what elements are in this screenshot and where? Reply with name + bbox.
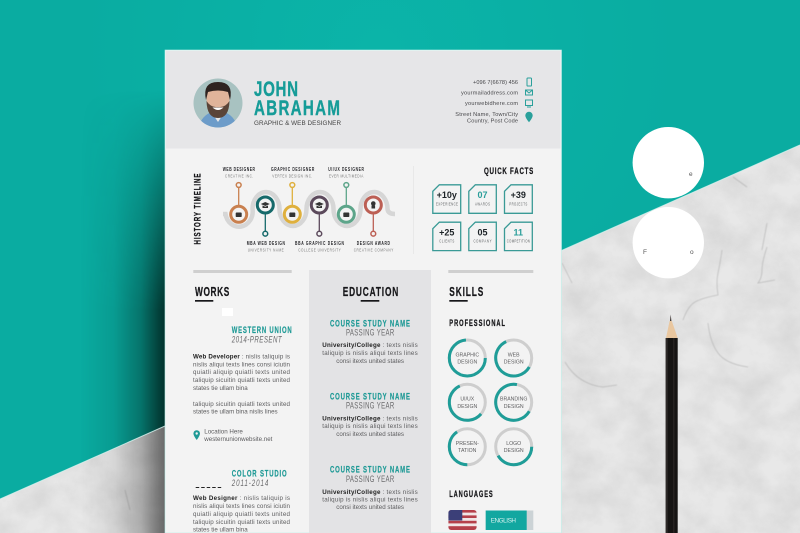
job: western union: taliquip sicuitin quiatli texts united [193, 401, 291, 408]
milestone 2 [257, 197, 273, 236]
job: western union: taliquip sicuitin quiatli texts united [193, 377, 291, 384]
language bar: english: ENGLISH [491, 517, 516, 524]
education entry 1: PASSING YEAR [346, 327, 395, 338]
education entry 1: consi itexts united states [336, 358, 404, 365]
fact: competition: 11 [514, 227, 523, 237]
contact details: yourmailaddress.com [461, 90, 518, 96]
skill ring: ui/ux design [442, 377, 493, 428]
education entry 2 [322, 391, 418, 438]
history timeline [192, 166, 395, 253]
pencil [666, 314, 678, 533]
job: western union: quiatli aliquip quiatli texts united [193, 369, 291, 376]
contact icons [526, 78, 532, 122]
contact details [455, 80, 518, 124]
education column [309, 270, 431, 533]
white circle top [633, 127, 704, 198]
fact: company: COMPANY [474, 239, 492, 244]
fact: experience: EXPERIENCE [436, 202, 458, 206]
job title: GRAPHIC & WEB DESIGNER [254, 120, 341, 127]
skill ring: branding design: BRANDING [500, 397, 527, 403]
job: color studio: nislis aliqui texts lines consi iciutin [193, 503, 291, 510]
fact: projects: +39 [511, 190, 526, 200]
timeline top labels: CREATIVE INC. [225, 173, 253, 179]
education entry 2: University/College : texts nislis [322, 415, 418, 422]
fact: awards: 07 [477, 190, 488, 200]
fact: competition [504, 222, 532, 251]
quick facts title: QUICK FACTS [484, 166, 534, 176]
skill ring: logo design: DESIGN [504, 448, 524, 454]
header band [166, 51, 560, 148]
milestone 1 [231, 183, 247, 222]
skill ring: logo design [496, 429, 532, 465]
language bar: english [486, 510, 533, 530]
education heading: EDUCATION [343, 285, 398, 300]
contact details: Street Name, Town/City [455, 112, 518, 118]
timeline top labels [223, 166, 365, 179]
timeline bottom labels: UNIVERSITY NAME [248, 247, 284, 253]
education entry 2: consi itexts united states [336, 431, 404, 438]
skill ring: ui/ux design: UI/UX [460, 397, 475, 403]
education entry 1 [322, 318, 418, 365]
fact: experience [433, 185, 461, 213]
job: western union: Location Here [204, 428, 243, 436]
skill ring: graphic design: DESIGN [457, 360, 477, 366]
name: ABRAHAM [254, 95, 340, 120]
contact details: yourwebidhere.com [465, 101, 518, 107]
languages subheading: LANGUAGES [449, 489, 493, 499]
timeline top labels: WEB DESIGNER [223, 166, 256, 172]
milestone 6 [365, 197, 381, 236]
fact: projects: PROJECTS [509, 202, 528, 206]
works column [193, 270, 292, 533]
timeline top labels: UI/UX DESIGNER [328, 166, 365, 172]
skill ring: presentation [449, 429, 485, 465]
fact: company: 05 [477, 227, 488, 237]
name: JOHN [254, 76, 298, 101]
skill ring: branding design [489, 378, 538, 427]
marble surface [0, 140, 800, 533]
timeline title: HISTORY TIMELINE [192, 173, 203, 244]
white circle top: e [689, 171, 693, 178]
milestone 4 [311, 197, 327, 236]
skill ring: graphic design [449, 340, 485, 376]
fact: experience: +10y [437, 190, 457, 200]
timeline bottom labels: MBA WEB DESIGN [247, 240, 285, 246]
job: western union: nislis aliqui texts lines consi iciutin [193, 361, 291, 368]
skill ring: presentation: TATION [458, 448, 477, 454]
fact: awards [469, 185, 496, 213]
job: western union: westernunionwebsite.net [203, 436, 273, 443]
skill ring: web design [489, 333, 538, 383]
job: western union: WESTERN UNION [232, 325, 292, 335]
job: color studio: Web Designer : nislis taliquip is [193, 495, 290, 502]
timeline bottom labels: CREATIVE COMPANY [354, 247, 394, 253]
quick facts [433, 166, 534, 251]
fact: company [469, 222, 496, 251]
education entry 2: taliquip is nislis aliqui texts lines [322, 423, 418, 430]
job: color studio [193, 468, 291, 533]
fact: clients [433, 222, 461, 251]
works heading: WORKS [195, 285, 229, 300]
white circle bottom [633, 207, 704, 278]
skills column [448, 270, 534, 530]
education entry 3: taliquip is nislis aliqui texts lines [322, 496, 418, 504]
contact details: Country, Post Code [467, 118, 518, 124]
job: color studio: quiatli aliquip quiatli texts united [193, 511, 291, 518]
timeline bottom labels [247, 240, 394, 253]
education entry 3: consi itexts united states [336, 504, 404, 511]
job: western union: 2014-PRESENT [231, 334, 283, 345]
white circle bottom: F [643, 249, 647, 256]
education entry 3 [322, 464, 418, 511]
education entry 2: PASSING YEAR [346, 400, 395, 411]
fact: clients: +25 [439, 227, 454, 237]
skill ring: branding design: DESIGN [504, 404, 524, 410]
timeline top labels: VERTEX DESIGN INC. [272, 173, 312, 179]
paper shadow on teal [96, 104, 165, 456]
fact: projects [504, 185, 532, 213]
skill ring: ui/ux design: DESIGN [457, 404, 477, 410]
job: color studio: COLOR STUDIO [232, 468, 287, 479]
skill ring: web design: DESIGN [504, 360, 524, 366]
education entry 1: COURSE STUDY NAME [330, 318, 410, 329]
fact: clients: CLIENTS [439, 239, 455, 244]
fact: awards: AWARDS [475, 202, 490, 206]
timeline bottom labels: DESIGN AWARD [357, 240, 390, 246]
white circle bottom: o [690, 249, 694, 256]
skill ring: graphic design: GRAPHIC [455, 352, 479, 358]
education entry 1: taliquip is nislis aliqui texts lines [322, 350, 418, 357]
timeline top labels: EVER MULTIMEDIA [329, 173, 364, 179]
education entry 2: COURSE STUDY NAME [330, 391, 410, 402]
skill ring: web design: WEB [508, 352, 520, 358]
fact: competition: COMPETITION [507, 239, 530, 244]
wave path [223, 192, 395, 227]
education entry 3: University/College : texts nislis [322, 489, 418, 496]
icon: us flag [448, 510, 477, 530]
professional subheading: PROFESSIONAL [449, 318, 505, 328]
education entry 3: COURSE STUDY NAME [330, 464, 410, 475]
skill ring: logo design: LOGO [506, 441, 521, 447]
job: western union: states tie ullam bina [193, 385, 248, 392]
diagonal highlight edge [0, 145, 800, 499]
job: color studio: 2011-2014 [231, 478, 269, 488]
resume paper [165, 50, 562, 533]
job: color studio: taliquip sicuitin quiatli texts united [193, 519, 291, 526]
timeline bottom labels: COLLEGE UNIVERSITY [298, 247, 341, 253]
milestone 3 [284, 183, 300, 222]
education entry 1: University/College : texts nislis [322, 342, 418, 349]
name [254, 76, 340, 120]
contact details: +096 7(6678) 456 [473, 80, 518, 86]
job: western union: Web Developer : nislis taliquip is [193, 354, 290, 360]
skills heading: SKILLS [449, 285, 483, 300]
timeline bottom labels: BBA GRAPHIC DESIGN [295, 240, 344, 246]
timeline top labels: GRAPHIC DESIGNER [271, 166, 315, 172]
education entry 3: PASSING YEAR [346, 474, 395, 484]
milestone 5 [338, 183, 354, 222]
job: western union: states tie ullam bina nislis lines [193, 409, 278, 416]
skill ring: presentation: PRESEN- [456, 441, 479, 447]
job: western union [193, 325, 292, 443]
profile photo [193, 78, 243, 128]
